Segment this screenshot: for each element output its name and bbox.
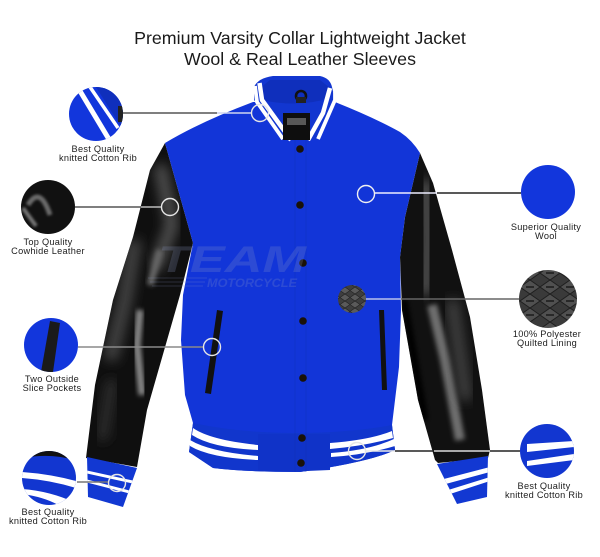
buttons bbox=[296, 145, 307, 467]
callout: collar rib: Best Quality bbox=[72, 144, 125, 154]
neck tag bbox=[283, 113, 310, 140]
callout: cuff rib: Best Quality bbox=[22, 507, 75, 517]
callout: waist rib: knitted Cotton Rib bbox=[505, 490, 583, 500]
callout: wool bbox=[358, 165, 581, 241]
callout: quilted lining bbox=[338, 270, 581, 348]
center placket bbox=[295, 140, 306, 472]
callout: collar rib bbox=[59, 84, 268, 163]
watermark logo: MOTORCYCLE bbox=[207, 278, 297, 290]
callout: leather: Top Quality bbox=[23, 237, 73, 247]
collar bbox=[254, 76, 335, 140]
callout: quilted lining: 100% Polyester bbox=[513, 329, 581, 339]
right leather sleeve bbox=[400, 153, 490, 463]
jacket illustration bbox=[80, 76, 495, 515]
callout: wool: Superior Quality bbox=[511, 222, 581, 232]
callout: quilted lining: Quilted Lining bbox=[517, 338, 577, 348]
left pocket bbox=[205, 310, 223, 394]
callout: waist rib bbox=[348, 424, 583, 500]
callout: leather: Cowhide Leather bbox=[11, 246, 85, 256]
title: Wool & Real Leather Sleeves bbox=[184, 49, 416, 69]
callout: cuff rib bbox=[9, 451, 126, 526]
callout: wool: Wool bbox=[535, 231, 557, 241]
left cuff bbox=[87, 457, 137, 507]
hanger loop bbox=[296, 91, 306, 101]
watermark logo bbox=[148, 239, 308, 290]
callout: waist rib: Best Quality bbox=[518, 481, 571, 491]
callout: pockets: Two Outside bbox=[25, 374, 79, 384]
callout: leather bbox=[11, 180, 178, 256]
right cuff bbox=[437, 456, 488, 504]
callout: cuff rib: knitted Cotton Rib bbox=[9, 516, 87, 526]
callout: pockets: Slice Pockets bbox=[23, 383, 82, 393]
watermark logo: TEAM bbox=[158, 239, 308, 280]
callout: collar rib: knitted Cotton Rib bbox=[59, 153, 137, 163]
title bbox=[134, 28, 466, 69]
left leather sleeve bbox=[86, 143, 193, 467]
title: Premium Varsity Collar Lightweight Jacket bbox=[134, 28, 466, 48]
waist rib band bbox=[189, 423, 395, 472]
callout: pockets bbox=[23, 318, 220, 393]
right pocket bbox=[379, 310, 387, 390]
jacket body bbox=[165, 102, 420, 472]
